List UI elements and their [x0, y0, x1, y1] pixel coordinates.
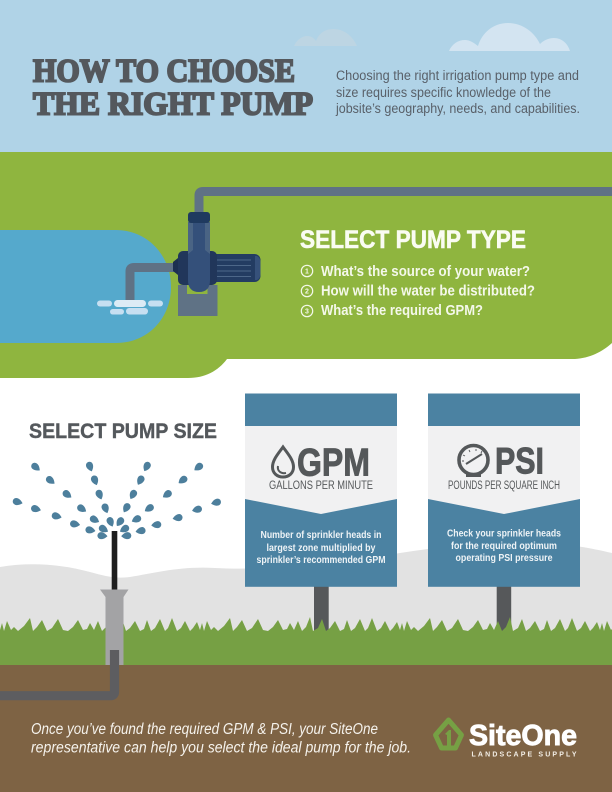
icon: pressure gauge: [459, 446, 488, 476]
label: gpm: GPM: [297, 442, 370, 484]
pump column: [188, 222, 210, 292]
intake pipe: [130, 268, 175, 300]
pump: [173, 212, 260, 292]
psi description: [447, 529, 561, 564]
question 1: What’s the source of your water?: [321, 264, 530, 280]
pond: [0, 230, 171, 343]
gpm description: sprinkler’s recommended GPM: [256, 555, 386, 566]
icon: water drop: [272, 447, 294, 477]
intro text: [335, 68, 580, 116]
ripples: [97, 300, 163, 314]
panel: select pump type: [0, 152, 612, 378]
sprinkler riser: [112, 531, 117, 590]
gpm description: largest zone multiplied by: [266, 543, 376, 554]
icon: siteone pentagon: [436, 720, 462, 748]
psi description: operating PSI pressure: [456, 553, 553, 564]
gpm description: [256, 530, 386, 566]
question 2: How will the water be distributed?: [321, 284, 535, 300]
tagline: LANDSCAPE SUPPLY: [472, 752, 577, 758]
closing text: [31, 721, 411, 756]
gpm description: Number of sprinkler heads in: [260, 530, 382, 541]
underground pipe: [0, 650, 114, 696]
large cloud: [449, 23, 570, 51]
discharge pipe: [199, 192, 612, 214]
title: [33, 54, 313, 122]
sky background: [0, 0, 612, 152]
question 3: What’s the required GPM?: [321, 303, 483, 319]
pump nub: [173, 258, 178, 275]
pump stand: [178, 285, 218, 316]
pump cap: [188, 212, 210, 223]
pump housing: [178, 251, 217, 285]
label: pounds per square inch: POUNDS PER SQUARE INCH: [448, 480, 560, 492]
hills: [0, 543, 612, 640]
intro text: Choosing the right irrigation pump type and: [336, 68, 579, 83]
sign post: gpm: [314, 586, 329, 636]
heading: select pump size: SELECT PUMP SIZE: [29, 419, 217, 443]
panel: gpm sign: [245, 394, 397, 587]
sprinkler: [100, 531, 128, 665]
question 2: 2: [305, 288, 309, 296]
label: psi: PSI: [495, 440, 544, 482]
question 1: 1: [305, 268, 309, 276]
motor: [210, 254, 260, 282]
grass: [0, 616, 612, 665]
intro text: jobsite’s geography, needs, and capabilities.: [335, 101, 580, 116]
wordmark: SiteOne: [469, 720, 577, 752]
sign post: psi: [497, 586, 511, 636]
question 3: 3: [305, 308, 309, 316]
closing text: Once you’ve found the required GPM & PSI, your SiteOne: [31, 721, 378, 738]
title: THE RIGHT PUMP: [33, 86, 313, 122]
sprinkler body: [100, 590, 128, 665]
logo: siteone: [436, 720, 577, 758]
closing text: representative can help you select the ideal pump for the job.: [31, 740, 411, 756]
psi description: for the required optimum: [451, 541, 557, 552]
heading: select pump type: SELECT PUMP TYPE: [300, 226, 526, 254]
panel: psi sign: [428, 394, 580, 587]
intro text: size requires specific knowledge of the: [336, 85, 551, 100]
label: gallons per minute: GALLONS PER MINUTE: [269, 480, 373, 492]
psi description: Check your sprinkler heads: [447, 529, 561, 540]
title: HOW TO CHOOSE: [33, 54, 295, 90]
soil: [0, 665, 612, 792]
question list: [301, 264, 535, 319]
pump column highlights: [188, 222, 210, 254]
water droplets: [12, 461, 222, 540]
small cloud: [294, 29, 357, 46]
